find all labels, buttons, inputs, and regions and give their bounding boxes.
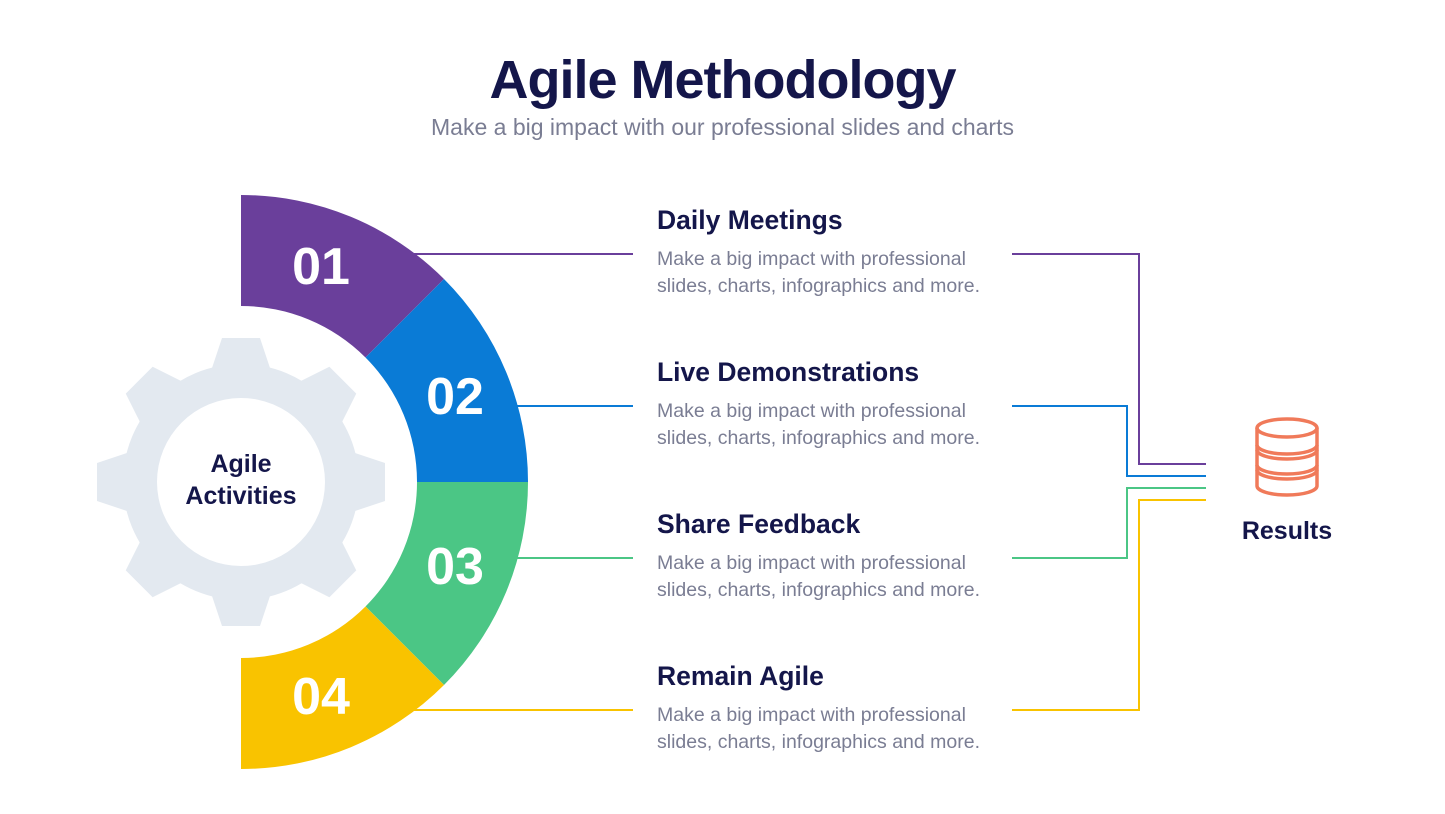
segment 01	[241, 195, 444, 358]
segment 04: 04	[292, 668, 350, 726]
segment 02: 02	[426, 368, 484, 426]
item 1: Daily Meetings	[657, 205, 843, 235]
icon: database	[1257, 419, 1317, 495]
segment 03	[366, 482, 528, 685]
connector lines left	[410, 254, 633, 710]
segment 03: 03	[426, 538, 484, 596]
segment 02	[366, 279, 528, 482]
title: Agile Methodology	[490, 50, 955, 110]
item 2	[657, 357, 980, 449]
subtitle: Make a big impact with our professional slides and charts	[431, 114, 1014, 140]
gear label	[185, 450, 297, 510]
item 3: Make a big impact with professional	[657, 552, 966, 574]
item 4: Remain Agile	[657, 661, 824, 691]
item 1: slides, charts, infographics and more.	[657, 275, 980, 297]
gear label: Activities	[185, 482, 297, 510]
item 2: Live Demonstrations	[657, 357, 919, 387]
item 4: slides, charts, infographics and more.	[657, 731, 980, 753]
results label: Results	[1242, 517, 1332, 545]
item 2: slides, charts, infographics and more.	[657, 427, 980, 449]
item 1	[657, 205, 980, 297]
segment 01: 01	[292, 238, 350, 296]
item 4	[657, 661, 980, 753]
connector lines right	[1012, 254, 1206, 710]
item 4: Make a big impact with professional	[657, 704, 966, 726]
item 3: Share Feedback	[657, 509, 860, 539]
gear label: Agile	[210, 450, 272, 478]
segment 04	[241, 606, 444, 769]
icon: gear	[97, 338, 385, 626]
item 3	[657, 509, 980, 601]
item 2: Make a big impact with professional	[657, 400, 966, 422]
item 3: slides, charts, infographics and more.	[657, 579, 980, 601]
item 1: Make a big impact with professional	[657, 248, 966, 270]
